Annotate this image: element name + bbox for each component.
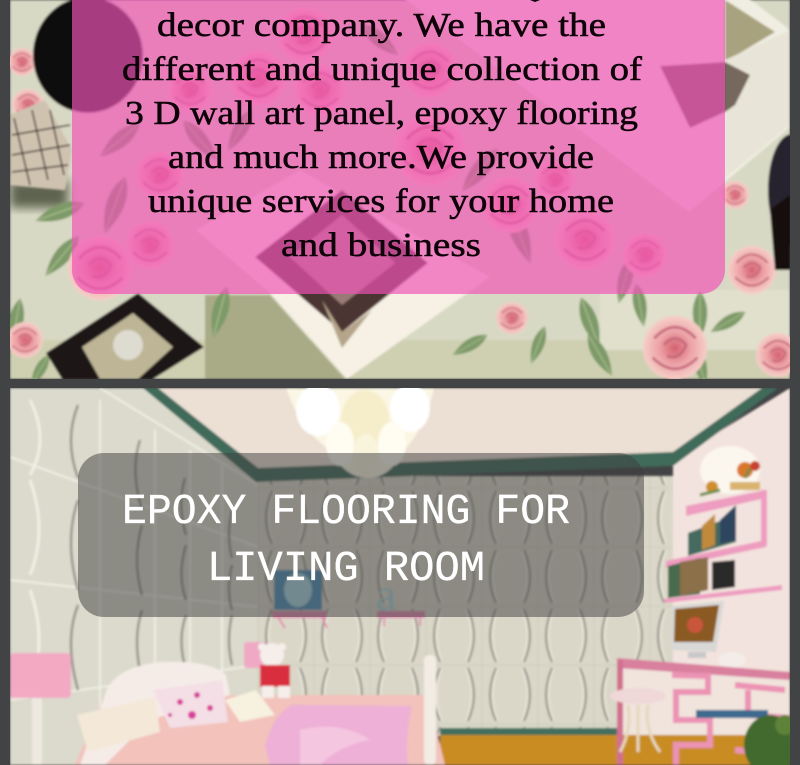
panel: floral room photo with pink overlay [5, 0, 800, 388]
text block: company description: decor company. We have the [157, 7, 606, 44]
bed [76, 694, 447, 765]
stool [610, 688, 666, 752]
back wall panels [255, 476, 673, 736]
clipped descender of the line above [530, 0, 540, 2]
text block: company description: different and unique collection of [122, 51, 643, 88]
lamp left [10, 653, 71, 698]
panel: bedroom photo with grey overlay [10, 384, 796, 765]
pink wall shelves [686, 490, 766, 516]
text block: company description: unique services for your home [148, 183, 614, 220]
ceiling [157, 388, 763, 470]
pink translucent overlay [72, 0, 725, 294]
black frame [46, 293, 204, 379]
heading: epoxy flooring for living room: EPOXY FLOORING FOR [122, 487, 570, 536]
heading: epoxy flooring for living room [125, 494, 570, 581]
green crown molding [143, 388, 778, 482]
plant [744, 715, 796, 765]
blanket [265, 705, 412, 765]
left wall [10, 388, 258, 765]
right wall [671, 388, 790, 670]
text block: company description: and much more.We provide [168, 139, 594, 176]
books [668, 505, 736, 598]
wall shelves with decor [274, 570, 322, 610]
dark chair objects [33, 0, 143, 113]
baseboard and floor [440, 728, 620, 735]
computer [671, 601, 746, 668]
text block: company description: and business [281, 227, 481, 264]
grey translucent overlay [78, 453, 644, 617]
chandelier [286, 384, 434, 478]
pink desk [617, 658, 790, 765]
photo: bedroom walls, ceiling and furniture [10, 384, 796, 765]
text block: company description [122, 7, 643, 264]
photo: floral floor, sofa and table [5, 0, 800, 388]
sofa [400, 0, 790, 212]
teddy bear [244, 642, 290, 698]
center table [196, 170, 490, 379]
text block: company description: 3 D wall art panel, epoxy flooring [125, 95, 638, 132]
flowers [700, 446, 760, 495]
photo: bedroom walls, ceiling and furniture: a [376, 569, 396, 620]
heading: epoxy flooring for living room: LIVING ROOM [207, 544, 485, 593]
